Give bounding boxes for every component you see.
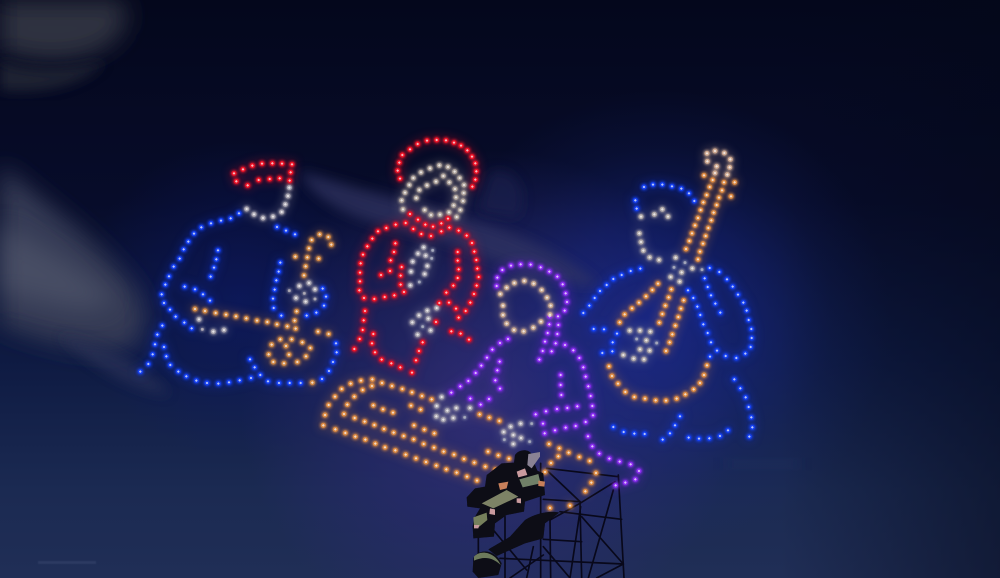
red hat (234, 163, 292, 185)
cream face (500, 281, 551, 331)
drone formations (140, 140, 752, 508)
orange zither (323, 379, 596, 508)
blue hat, arms and feet (583, 185, 752, 440)
small white lights (202, 291, 315, 329)
white hands (410, 247, 437, 335)
red halo, robe and legs (354, 140, 479, 373)
blue body outline (140, 213, 337, 384)
white face and hand (199, 188, 315, 332)
camera crew silhouettes (467, 450, 559, 578)
figure 3: purple musician playing zither (323, 264, 639, 508)
figure 1: seated musician with string instrument (140, 163, 337, 384)
orange lute and body (609, 175, 735, 401)
scaffold frame (478, 463, 624, 578)
clouds (0, 0, 800, 564)
orange instrument (195, 234, 331, 383)
figure 2: musician with red halo (354, 140, 479, 373)
figure 4: standing musician with lute (583, 151, 752, 440)
white hands (436, 397, 521, 444)
lute head pale (707, 151, 730, 175)
purple body (451, 264, 639, 485)
white face and lute strings (623, 209, 692, 359)
white face (402, 165, 464, 217)
